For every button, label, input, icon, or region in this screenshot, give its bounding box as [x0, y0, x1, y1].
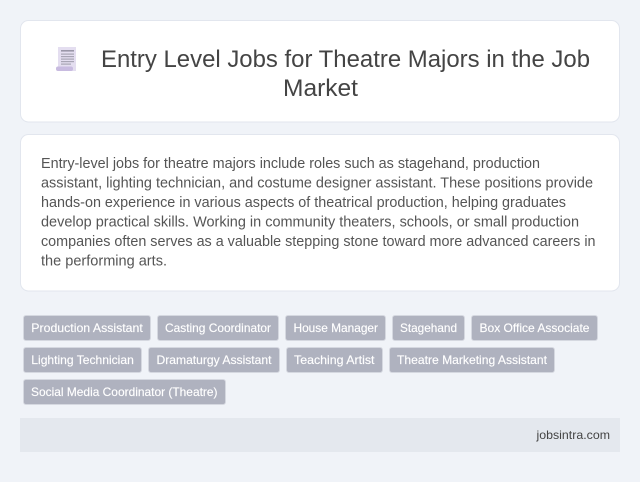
tag: Teaching Artist: Teaching Artist — [294, 353, 375, 367]
tag: Teaching Artist — [286, 348, 382, 372]
text block: description: assistant, lighting technician, and costume designer assistant. These positions provide — [41, 176, 593, 192]
text block: description: hands-on experience in various aspects of theatrical production, helping graduates — [41, 195, 566, 211]
tag: Theatre Marketing Assistant — [390, 348, 554, 372]
tag: House Manager: House Manager — [294, 321, 378, 335]
tag: Social Media Coordinator (Theatre) — [24, 380, 226, 404]
title: Entry Level Jobs for Theatre Majors in the Job — [101, 46, 590, 73]
tag: Lighting Technician — [24, 348, 142, 372]
footer credit: jobsintra.com — [535, 428, 610, 442]
panel: header — [20, 20, 620, 122]
tag: Stagehand: Stagehand — [400, 321, 457, 335]
tag: Stagehand — [392, 316, 464, 340]
text block: description — [41, 156, 596, 270]
tag: House Manager — [286, 316, 386, 340]
tag list — [24, 316, 598, 404]
panel: description — [20, 134, 620, 291]
tag: Casting Coordinator — [158, 316, 278, 340]
text block: description: companies often serves as a valuable stepping stone toward more advanced careers in — [41, 234, 596, 250]
tag: Theatre Marketing Assistant: Theatre Marketing Assistant — [397, 353, 548, 367]
tag: Production Assistant: Production Assistant — [31, 321, 143, 335]
text block: description: Entry-level jobs for theatre majors include roles such as stagehand, production — [41, 156, 540, 172]
tag: Dramaturgy Assistant: Dramaturgy Assistant — [156, 353, 272, 367]
tag: Dramaturgy Assistant — [148, 348, 280, 372]
tag: Production Assistant — [24, 316, 150, 340]
tag: Box Office Associate — [472, 316, 598, 340]
text block: description: the performing arts. — [41, 254, 167, 270]
icon: paper scroll — [56, 47, 76, 71]
tag: Lighting Technician: Lighting Technician — [31, 353, 134, 367]
tag: Casting Coordinator: Casting Coordinator — [165, 321, 271, 335]
tag: Social Media Coordinator (Theatre): Social Media Coordinator (Theatre) — [31, 385, 218, 399]
footer — [20, 418, 620, 452]
title: Market — [283, 75, 358, 102]
title — [101, 46, 590, 102]
text block: description: develop practical skills. Working in community theaters, schools, or small production — [41, 214, 579, 230]
tag: Box Office Associate: Box Office Associate — [480, 321, 590, 335]
